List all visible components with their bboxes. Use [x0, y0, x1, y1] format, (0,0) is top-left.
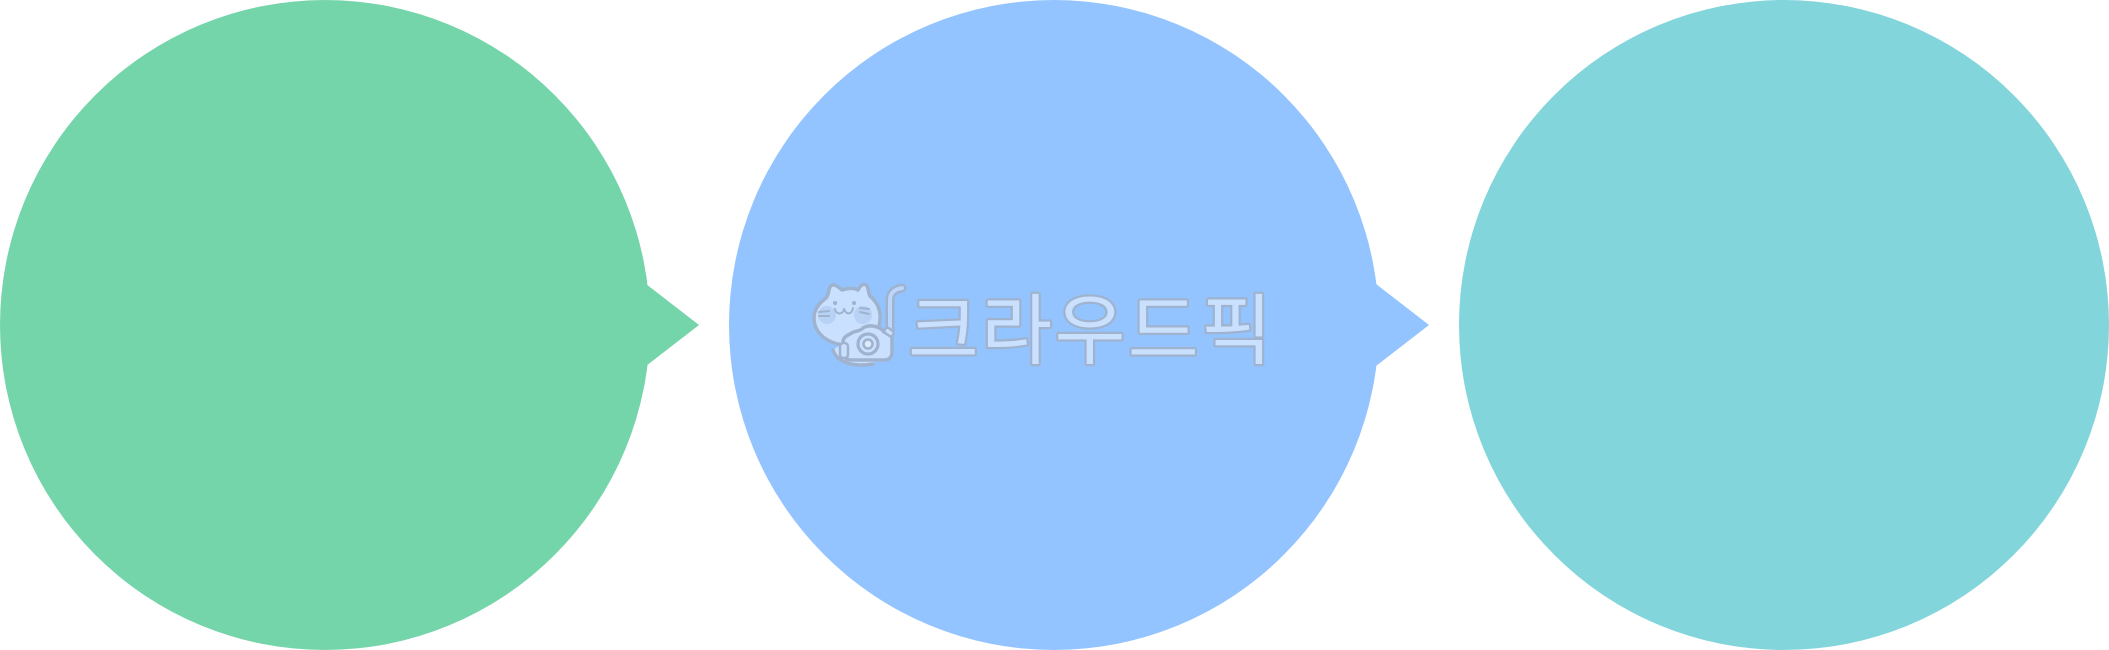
icon: camera — [840, 326, 895, 360]
icon: cat face — [819, 303, 869, 316]
blue circle with arrow — [729, 0, 1429, 650]
watermark wordmark: 크라우드픽 — [908, 289, 1272, 375]
icon: tail — [890, 288, 902, 331]
icon: lower body arc — [833, 345, 880, 365]
watermark logo: cat with camera — [814, 284, 902, 365]
icon: lower body outline — [833, 350, 873, 365]
teal circle — [1459, 0, 2109, 650]
icon: cat body — [814, 284, 880, 345]
green circle with arrow — [0, 0, 699, 650]
icon: cat cheeks — [818, 306, 872, 324]
